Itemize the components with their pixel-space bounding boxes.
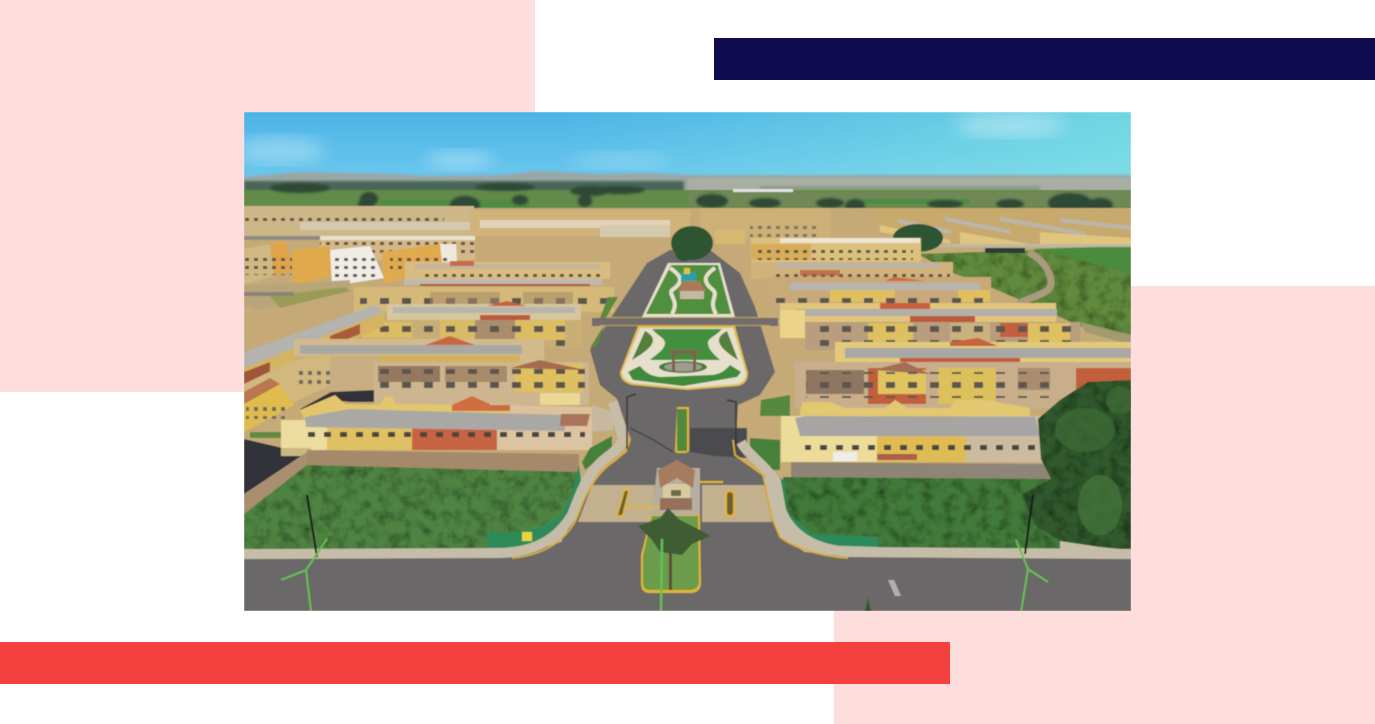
apartment blocks left	[244, 236, 475, 310]
sidewalk backing under lots	[548, 478, 1118, 556]
right sidewalk and curb	[733, 440, 1131, 558]
town base	[244, 208, 1131, 480]
dark road patch	[690, 428, 747, 458]
left housing rows	[354, 261, 614, 348]
left front row	[281, 395, 592, 456]
central green light pole	[661, 539, 662, 611]
distant hills and town	[244, 171, 1131, 200]
gate medians	[616, 481, 735, 517]
road marking	[888, 580, 901, 596]
left green light pole	[281, 539, 327, 611]
right row with grey roof	[835, 338, 1131, 364]
farm fields	[244, 188, 1131, 209]
panel: pink block top left	[0, 0, 535, 392]
lower oval garden	[620, 326, 748, 390]
photo: aerial view of housing development	[244, 112, 1131, 611]
yellow sign on fence	[522, 532, 532, 541]
right gate plaza	[702, 485, 772, 522]
left row brown and yellow	[374, 360, 589, 405]
right green fence	[780, 478, 878, 547]
grass field on the right with dirt path	[918, 246, 1131, 345]
left gate plaza	[578, 485, 655, 522]
right boundary wall	[791, 462, 1051, 479]
left middle row	[294, 336, 544, 363]
panel: pink block bottom right	[834, 286, 1375, 724]
left green lot	[244, 465, 579, 550]
right housing rows	[751, 238, 1080, 350]
cross street	[592, 317, 778, 326]
left black lamp post	[307, 495, 317, 557]
right front row	[781, 400, 1050, 462]
right green lot	[783, 477, 1060, 550]
left diagonal row	[244, 305, 384, 386]
small evergreen at bottom	[865, 598, 871, 611]
large tree on right	[1022, 380, 1134, 550]
tree on island	[638, 508, 710, 590]
left sidewalk and curb	[244, 402, 630, 558]
right row brown and yellow	[795, 362, 1131, 408]
main road	[244, 250, 1131, 611]
far housing rows	[244, 206, 1131, 252]
bar: navy top right	[714, 38, 1375, 80]
central planted island	[641, 515, 701, 593]
boulevard lamp posts	[627, 394, 736, 449]
courtyards beside boulevard	[582, 297, 790, 470]
right black lamp post	[1025, 495, 1033, 554]
bar: red bottom left	[0, 642, 950, 684]
boulevard median	[675, 407, 689, 453]
tree at head of boulevard	[671, 226, 713, 261]
left green fence	[487, 465, 581, 548]
parking lot	[244, 390, 377, 496]
road tar seam	[630, 428, 673, 452]
upper garden	[642, 263, 735, 317]
left yellow block	[244, 355, 380, 432]
distant trees	[270, 182, 1114, 208]
left boundary wall	[244, 450, 579, 514]
right green light pole	[1016, 540, 1048, 612]
gatehouse pavement	[652, 468, 700, 516]
gatehouse	[658, 460, 695, 510]
sky	[235, 112, 1131, 182]
